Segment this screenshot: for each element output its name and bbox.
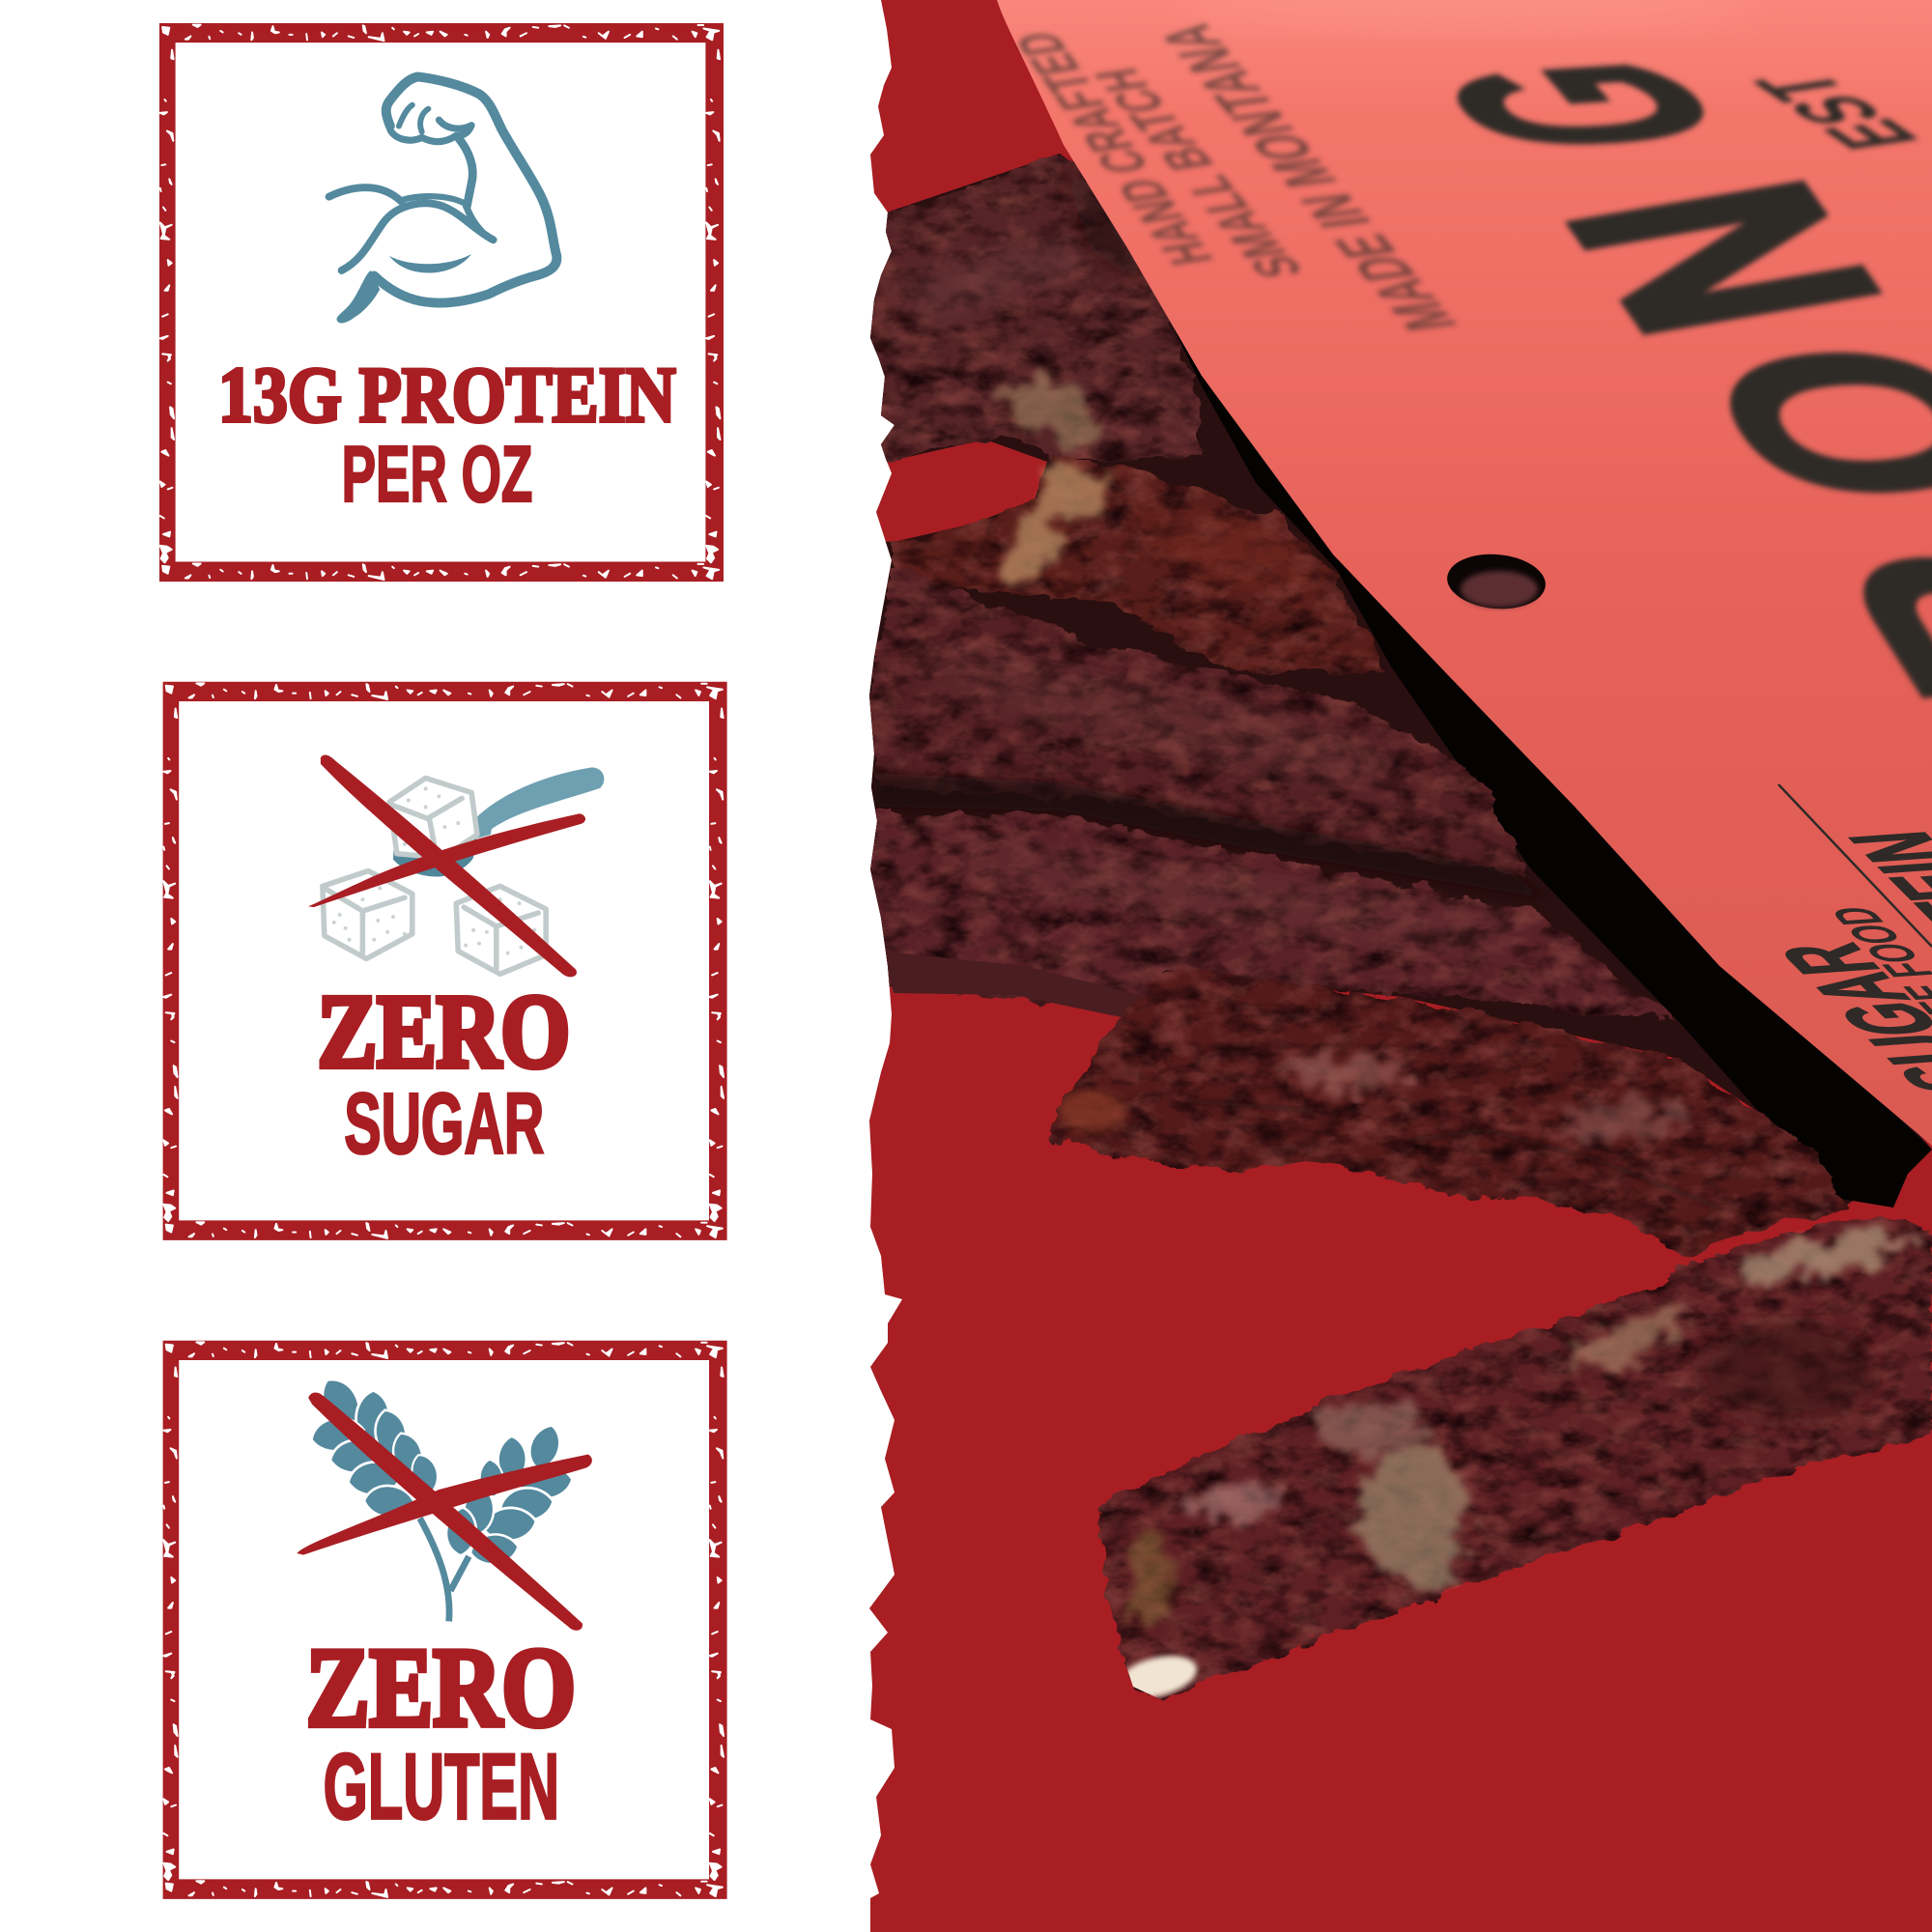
distressed frame: [159, 23, 724, 582]
icon: flexed arm: [329, 76, 556, 324]
heading: 13G PROTEIN: 13G PROTEIN: [218, 351, 676, 439]
subheading: GLUTEN: GLUTEN: [324, 1735, 559, 1838]
jerky stick: blurred upper cluster: [869, 154, 1202, 466]
tag big letters: [1453, 60, 1932, 703]
tag hole: [1447, 554, 1546, 611]
red background: [850, 0, 1932, 1932]
tag bright blur: [1179, 0, 1758, 34]
dark mass behind jerky: [869, 154, 1932, 1207]
lower sliver: [884, 952, 1140, 1019]
sheen stick A: [956, 655, 1366, 784]
panel: zero gluten: [163, 1341, 727, 1899]
panel: zero sugar: [163, 682, 727, 1240]
jerky stick A: [869, 570, 1528, 874]
icon: sugar cubes on spoon: [323, 767, 604, 974]
tag big letters: G: [1368, 53, 1795, 157]
jerky stick B: [869, 813, 1676, 1023]
jerky stick C: [1050, 969, 1844, 1259]
heading: ZERO: ZERO: [306, 1626, 576, 1750]
shadow under the tag: [1053, 155, 1932, 1208]
tag sharp print bottom right: [1785, 832, 1932, 1090]
icon: red cross: [297, 1392, 592, 1631]
price tag card: [997, 0, 1932, 1146]
cluster sheen: [1142, 506, 1314, 587]
crevice between sticks: [874, 773, 1546, 898]
sheen stick B: [997, 846, 1489, 948]
jerky stick D foreground: [1098, 1218, 1932, 1699]
panel: photo on red torn background: [850, 0, 1932, 1932]
heading: ZERO: ZERO: [318, 974, 570, 1090]
distressed frame: [163, 682, 727, 1240]
distressed frame: [163, 1341, 727, 1899]
subheading: PER OZ: PER OZ: [342, 431, 532, 519]
panel: 13g protein per oz: [159, 23, 724, 582]
subheading: SUGAR: SUGAR: [344, 1075, 544, 1172]
tan fibrous patch: [995, 464, 1121, 589]
highlights upper cluster: [990, 377, 1092, 444]
red notch right of sticks: [1931, 1150, 1932, 1151]
tag divider line: [1778, 784, 1932, 947]
tag small blurred print: HAND CRAFTED: [1001, 29, 1227, 269]
jerky stick: second cluster with tan end: [894, 456, 1386, 671]
highlights stick D: [1113, 1219, 1915, 1706]
highlights stick C: [1058, 1055, 1719, 1208]
tag small blurred print: SMALL BATCH: [1080, 65, 1317, 281]
tag small blurred print: MADE IN MONTANA: [1142, 20, 1474, 334]
icon: red cross: [308, 755, 585, 977]
icon: wheat: [309, 1372, 574, 1621]
